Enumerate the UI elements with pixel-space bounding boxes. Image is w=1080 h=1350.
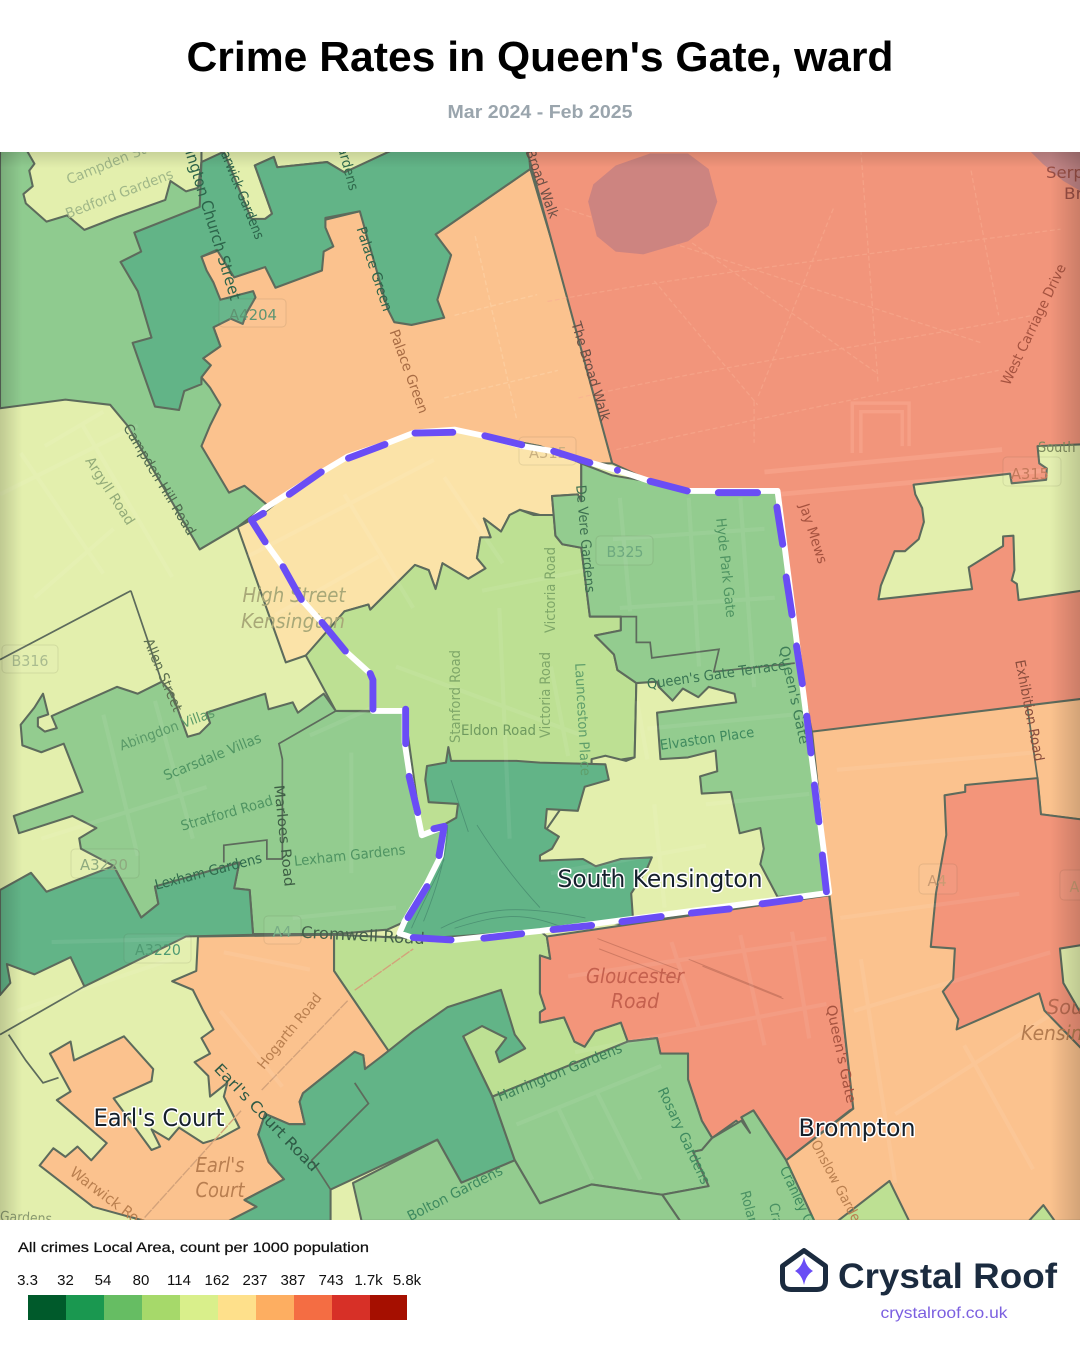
label: Launceston Place: Launceston Place <box>571 663 593 776</box>
area: Roland Gardens green <box>662 1110 814 1221</box>
street network overlay <box>0 412 1067 1183</box>
legend value labels: 237 <box>242 1272 268 1289</box>
label: Scarsdale Villas: Scarsdale Villas <box>161 730 264 784</box>
area: Courtfield dark green <box>229 990 525 1221</box>
legend value labels: 114 <box>167 1272 191 1289</box>
area: Cromwell Road west dark green <box>0 862 253 995</box>
ward dashes in purple <box>251 432 826 940</box>
label: High Street Kensington station: Kensington <box>241 609 345 633</box>
shield: B316: B316 <box>12 652 48 670</box>
label: Cranley Gardens: Cranley Gardens <box>776 1164 835 1266</box>
label: Stratford Road: Stratford Road <box>179 793 275 835</box>
label: Marloes Road: Marloes Road <box>270 784 297 887</box>
legend value labels: 80 <box>133 1272 149 1289</box>
place label: South Kensington: South Kensington <box>558 865 762 893</box>
shield: A4 Cromwell <box>264 916 301 944</box>
brand url: crystalroof.co.uk <box>880 1305 1009 1322</box>
Gloucester Road rail lines <box>597 939 783 999</box>
Albert Memorial square <box>852 403 909 453</box>
label: Exhibition Road: Exhibition Road <box>1011 659 1047 763</box>
area: Hyde Park Gate green <box>552 463 829 897</box>
label: Serpentine Bridge <box>1046 163 1080 203</box>
area: Princes Gate yellow-green <box>878 444 1080 600</box>
legend value labels: 32 <box>57 1272 74 1289</box>
area: Bedford Gardens yellow <box>22 152 200 231</box>
area: Harrington Gardens green <box>492 1038 712 1203</box>
legend value labels: 54 <box>95 1272 111 1289</box>
label: Earl's Court Road: Earl's Court Road <box>210 1060 323 1175</box>
legend value labels: 743 <box>318 1272 344 1289</box>
Earl's Court rail lines <box>145 949 413 1217</box>
label: Argyll Road: Argyll Road <box>82 454 137 528</box>
label: High Street Kensington station: High Street <box>242 583 347 607</box>
label: Gardens bottom left: Gardens <box>0 1209 52 1228</box>
label: High Street Kensington station <box>241 583 347 633</box>
area: Cromwell Road south light green <box>334 931 628 1097</box>
legend value labels: 1.7k <box>354 1272 383 1289</box>
label: Earl's Court station <box>196 1153 246 1202</box>
inner boundary: Marloes Road <box>224 711 336 862</box>
place label: Brompton: Brompton <box>798 1114 916 1142</box>
label: Eldon Road: Eldon Road <box>461 723 536 739</box>
legend value labels: 5.8k <box>393 1272 422 1289</box>
area: Brompton orange <box>786 699 1080 1221</box>
ward boundary <box>251 430 829 940</box>
shield: A3220 south <box>124 934 191 963</box>
shield: B316 <box>2 645 58 673</box>
label: Abingdon Villas: Abingdon Villas <box>118 705 217 754</box>
boundary lines in the west <box>0 591 162 1083</box>
shield: A4 far east <box>1060 870 1080 900</box>
brand name: Crystal Roof <box>838 1257 1057 1296</box>
legend value labels: 162 <box>204 1272 230 1289</box>
logo: Crystal Roof <box>782 1250 1057 1322</box>
area: Abingdon and Lexham green <box>14 682 442 934</box>
label: Elvaston Place: Elvaston Place <box>659 725 755 754</box>
label: Cranley Place: Cranley Place <box>765 1202 797 1293</box>
area: Kensington Court pale yellow <box>238 430 581 662</box>
label: Cromwell Road: Cromwell Road <box>300 923 425 948</box>
shield: A315 east: A315 <box>1011 465 1049 483</box>
legend title: All crimes Local Area, count per 1000 population <box>18 1239 369 1255</box>
icon: house with star <box>782 1250 826 1290</box>
label: Stanford Road: Stanford Road <box>448 650 464 743</box>
label: Broad Walk north: Broad Walk <box>522 148 562 221</box>
Kensington Gore road band <box>764 450 1067 494</box>
label: Campden Hill Road: Campden Hill Road <box>119 421 198 538</box>
label: Lexham Gardens west: Lexham Gardens <box>153 851 264 894</box>
label: De Vere Gardens: De Vere Gardens <box>572 484 597 593</box>
area: Bolton Gardens green <box>353 1140 680 1221</box>
label: Victoria Road north: Victoria Road <box>543 547 559 633</box>
label: Onslow Gardens: Onslow Gardens <box>807 1138 871 1238</box>
legend <box>17 1239 422 1320</box>
label: The Broad Walk: The Broad Walk <box>567 319 613 424</box>
park paths <box>548 150 1061 450</box>
area: Kensington Palace orange <box>201 169 612 513</box>
label: Campden Street: Campden St <box>64 142 149 188</box>
orange park paths <box>444 236 558 419</box>
shield: B325 <box>596 536 653 565</box>
label: Gardens top: Gardens <box>331 135 361 192</box>
legend colour scale <box>28 1295 407 1320</box>
shield: B325: B325 <box>606 543 644 561</box>
place label: Earl's Court: Earl's Court <box>94 1104 224 1132</box>
label: Victoria Road south: Victoria Road <box>538 652 554 738</box>
shield: A4 Cromwell: A4 <box>272 923 292 941</box>
shield: A3220 north <box>71 849 139 878</box>
label: Bedford Gardens: Bedford Gardens <box>63 167 176 222</box>
label: Hyde Park Gate: Hyde Park Gate <box>712 517 739 618</box>
area: Victoria Road light green <box>306 510 636 839</box>
label: Jay Mews: Jay Mews <box>795 501 830 566</box>
area: Warwick Gardens yellow <box>200 152 386 218</box>
label: Roland Gardens: Roland Gardens <box>736 1189 778 1290</box>
area: east edge yellow-green <box>1060 945 1080 1014</box>
label: Earl's Court station: Court <box>196 1178 246 1202</box>
label: West Carriage Drive: West Carriage Drive <box>999 262 1070 388</box>
label: Warwick Road: Warwick Road <box>66 1163 157 1238</box>
map edge shading <box>0 152 1080 1220</box>
lake: Round Pond <box>588 153 717 254</box>
title: Crime Rates in Queen's Gate, ward <box>186 33 894 80</box>
label: Queen's Gate Terrace: Queen's Gate Terrace <box>646 657 787 693</box>
label: Palace Green south: Palace Green <box>386 328 431 416</box>
area: South Kensington station dark green <box>401 747 652 940</box>
label: Lexham Gardens east: Lexham Gardens <box>293 842 406 870</box>
label: Kensington Church Street: Kensington Church Street <box>171 113 245 302</box>
shield: A315 <box>519 437 576 465</box>
label: Allen Street: Allen Street <box>140 636 185 715</box>
shield: A315 east <box>1003 457 1061 486</box>
railway tracks <box>411 780 585 928</box>
area: Thurloe salmon <box>931 778 1080 1048</box>
shield: A3220 north: A3220 <box>80 856 128 874</box>
area: Gloucester Road salmon <box>540 895 853 1160</box>
label: South Kensington station east <box>1021 995 1080 1045</box>
shield: A3220 south: A3220 <box>135 941 181 959</box>
label: Warwick Gardens: Warwick Gardens <box>213 138 267 242</box>
shield: A4 east: A4 <box>928 872 946 890</box>
shield: A4204 <box>219 299 286 327</box>
label: Gloucester Road station: Gloucester <box>586 964 686 988</box>
lake: Serpentine <box>1031 152 1080 190</box>
subtitle: date range: Mar 2024 - Feb 2025 <box>448 102 632 122</box>
label: Queen's Gate north: Queen's Gate <box>775 645 812 746</box>
legend value labels <box>17 1272 422 1289</box>
label: Queen's Gate south: Queen's Gate <box>822 1004 859 1105</box>
ward outline in white <box>251 430 829 940</box>
label: Harrington Gardens: Harrington Gardens <box>495 1041 625 1105</box>
label: Gloucester Road station: Road <box>611 989 659 1013</box>
area: south light green patches <box>838 1181 1055 1221</box>
area: Campden Hill green <box>0 152 265 550</box>
shield: A315: A315 <box>529 444 567 462</box>
shield: A4204: A4204 <box>229 306 277 324</box>
legend value labels: 387 <box>280 1272 306 1289</box>
legend value labels: 3.3 <box>17 1272 38 1289</box>
area: Queen's Gate Gardens yellow-green <box>546 682 734 925</box>
area: Hyde Park salmon <box>527 150 1080 732</box>
label: Rosary Gardens: Rosary Gardens <box>654 1085 713 1187</box>
label: Earl's Court station: Earl's <box>196 1153 244 1177</box>
area: Exhibition Road boundary <box>1027 706 1080 819</box>
inner boundary line <box>621 617 795 672</box>
label: Hogarth Road: Hogarth Road <box>254 990 325 1073</box>
shield: A4 east <box>919 864 957 894</box>
label: Palace Green north: Palace Green <box>353 225 395 313</box>
area: Earl's Court orange <box>40 935 389 1221</box>
area: Kensington Church Street dark green <box>121 150 530 410</box>
label: Gloucester Road station <box>586 964 686 1013</box>
label: Bolton Gardens: Bolton Gardens <box>405 1163 506 1225</box>
inner boundary: Courtfield <box>312 1083 368 1190</box>
